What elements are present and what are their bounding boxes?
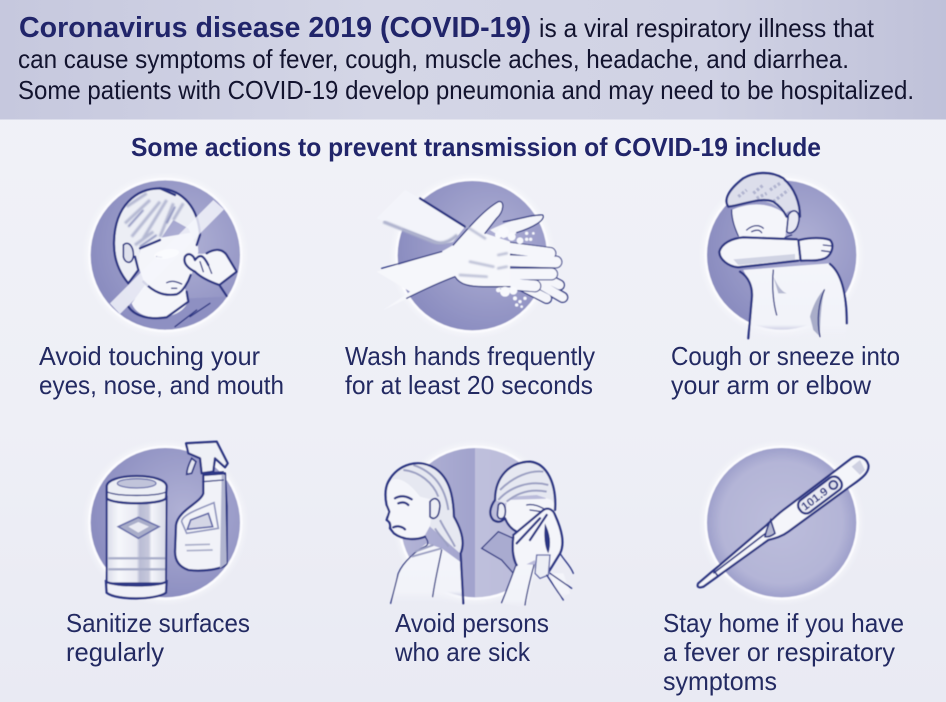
panel: avoid touching face: [39, 175, 284, 400]
caption: Stay home if you have: [663, 608, 904, 638]
caption: Avoid touching your: [39, 341, 260, 371]
intro bold lead: Coronavirus disease 2019 (COVID-19): [19, 12, 531, 44]
heading: Some actions to prevent transmission of COVID-19 include: [131, 132, 821, 162]
caption: [345, 341, 595, 400]
woman on left: [385, 463, 463, 603]
icon: child rubbing eye, crossed out: [85, 175, 245, 335]
icon: two people, one sneezing into a tissue: [385, 443, 573, 608]
icon: washing hands: [377, 176, 563, 336]
caption: [39, 341, 284, 400]
caption: [66, 608, 250, 667]
panel: sanitize surfaces: [66, 442, 250, 667]
caption: Sanitize surfaces: [66, 608, 250, 638]
intro line 1: is a viral respiratory illness that: [539, 13, 875, 43]
panel: avoid sick persons: [385, 443, 573, 667]
caption: eyes, nose, and mouth: [39, 370, 284, 400]
caption: your arm or elbow: [671, 370, 871, 400]
caption: regularly: [66, 637, 164, 667]
intro band: [0, 0, 946, 120]
icon: wipes canister and spray bottle: [85, 442, 245, 603]
caption: a fever or respiratory: [663, 637, 895, 667]
caption: Cough or sneeze into: [671, 341, 900, 371]
panel: stay home if fever: [663, 443, 904, 696]
woman on right, sneezing: [482, 462, 573, 608]
caption: for at least 20 seconds: [345, 370, 593, 400]
intro line 2: can cause symptoms of fever, cough, muscle aches, headache, and diarrhea.: [18, 44, 849, 74]
caption: Wash hands frequently: [345, 341, 595, 371]
caption: [671, 341, 900, 400]
caption: [394, 608, 549, 667]
panel: cough into elbow: [671, 173, 900, 400]
caption: [663, 608, 904, 696]
thermometer digits: 101.9: [799, 486, 831, 513]
caption: Avoid persons: [395, 608, 549, 638]
icon: person coughing into elbow: [702, 173, 862, 340]
icon: digital thermometer: [698, 443, 868, 603]
panel: wash hands: [345, 176, 595, 400]
caption: symptoms: [663, 666, 777, 696]
caption: who are sick: [394, 637, 531, 667]
